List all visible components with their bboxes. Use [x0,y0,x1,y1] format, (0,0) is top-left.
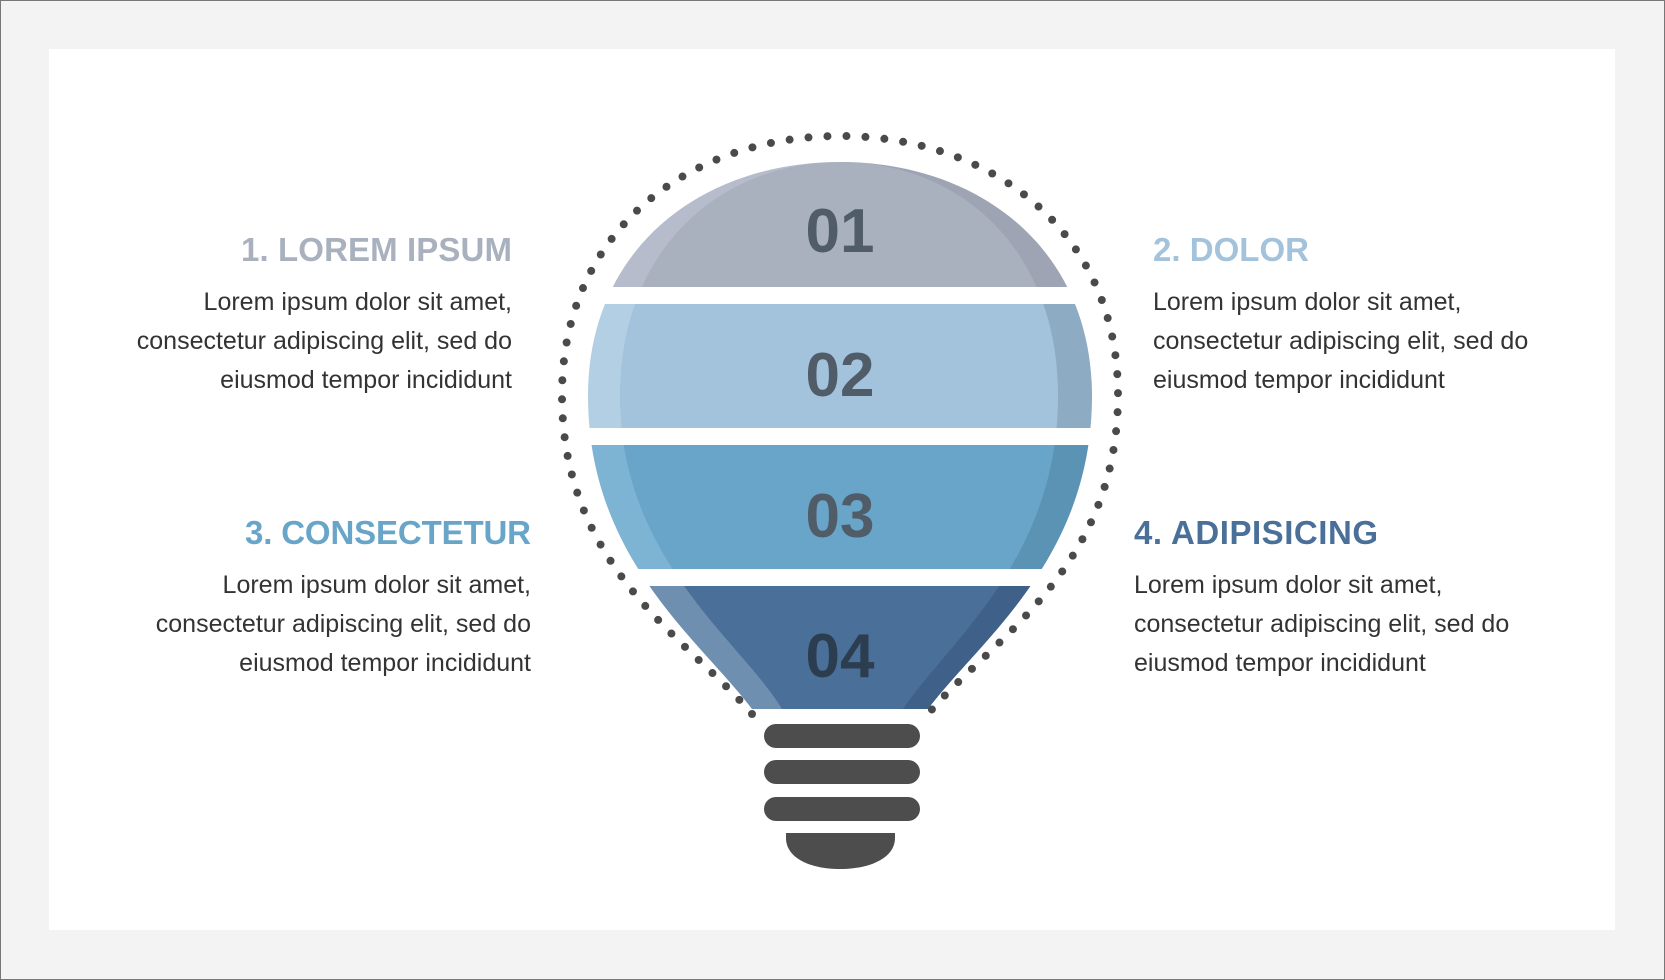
numbers: 04 [806,622,875,691]
text block 1: consectetur adipiscing elit, sed do [137,327,512,355]
text block 2: Lorem ipsum dolor sit amet, [1153,288,1461,316]
text block 2 [1153,231,1528,394]
text block 2: 2. DOLOR [1153,231,1309,268]
text block 3 [156,514,531,677]
text block 2: consectetur adipiscing elit, sed do [1153,327,1528,355]
text block 3: 3. CONSECTETUR [245,514,531,551]
text block 1: Lorem ipsum dolor sit amet, [204,288,512,316]
bulb [580,150,1100,716]
dotted outline [562,136,1118,714]
text block 4 [1134,514,1509,677]
numbers: 02 [806,341,874,410]
numbers: 01 [806,197,874,266]
text block 2: eiusmod tempor incididunt [1153,366,1445,394]
numbers [806,197,875,691]
text block 4: 4. ADIPISICING [1134,514,1378,551]
text block 1: eiusmod tempor incididunt [220,366,512,394]
numbers: 03 [806,482,874,551]
text block 3: consectetur adipiscing elit, sed do [156,610,531,638]
text block 1: 1. LOREM IPSUM [241,231,512,268]
bulb base [764,724,920,869]
text block 3: Lorem ipsum dolor sit amet, [223,571,531,599]
text block 4: consectetur adipiscing elit, sed do [1134,610,1509,638]
text block 4: eiusmod tempor incididunt [1134,649,1426,677]
text block 3: eiusmod tempor incididunt [239,649,531,677]
text block 4: Lorem ipsum dolor sit amet, [1134,571,1442,599]
text block 1 [137,231,512,394]
